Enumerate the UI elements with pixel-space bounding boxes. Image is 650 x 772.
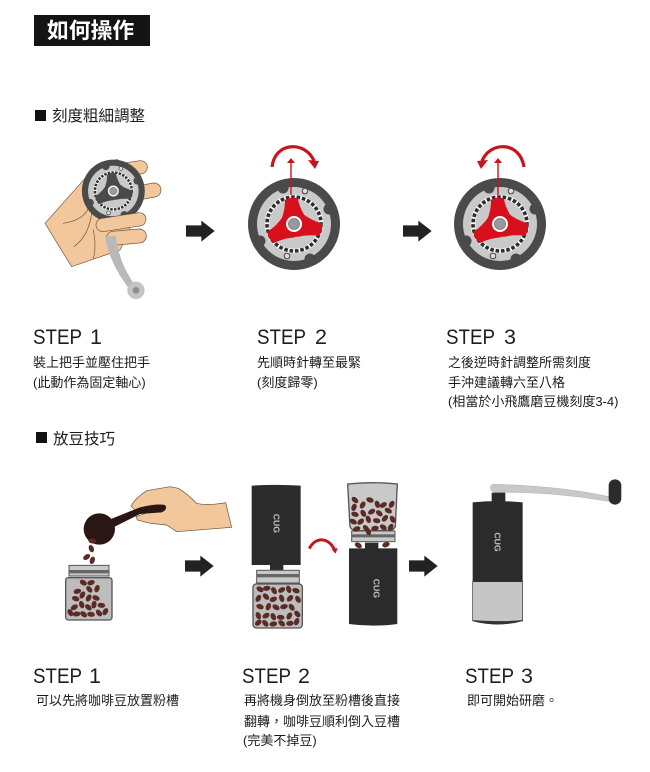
icon: palm and back fingers [45, 159, 154, 267]
bottom step 3 text: STEP [465, 664, 514, 688]
step 3 text: STEP [446, 325, 495, 349]
step 2 text: 2 [315, 325, 327, 349]
bottom step 1 text: 可以先將咖啡豆放置粉槽 [36, 693, 179, 708]
falling beans [82, 538, 96, 565]
icon: handle [105, 236, 145, 299]
bottom step 3 text: 即可開始研磨。 [467, 693, 558, 708]
step 1 text: (此動作為固定軸心) [33, 375, 146, 390]
icon: grinder body upright: CUG [372, 579, 382, 598]
step 3 text: (相當於小飛鷹磨豆機刻度3-4) [448, 394, 618, 409]
bottom step 1 text [33, 664, 179, 708]
step 3 text: 手沖建議轉六至八格 [448, 375, 565, 390]
bottom step 3 text [465, 664, 558, 708]
bottom step 2 text: 2 [298, 664, 310, 688]
bottom step 2 text: 翻轉，咖啡豆順利倒入豆槽 [244, 714, 400, 729]
title: 如何操作 [47, 18, 134, 43]
illustration: assembled grinder [473, 479, 621, 624]
icon: hand [131, 487, 232, 532]
step 2 text: 先順時針轉至最緊 [257, 355, 361, 370]
icon: grinder body upright [349, 543, 397, 626]
bottom step 2 text: STEP [242, 664, 291, 688]
icon: grinder body upside down: CUG [271, 514, 281, 533]
step 3 text: 3 [504, 325, 516, 349]
heading: dial adjustment: 刻度粗細調整 [52, 107, 145, 125]
step 2 text: STEP [257, 325, 306, 349]
step 1 text [33, 325, 150, 390]
illustration: scooping beans into jar [66, 487, 232, 620]
icon: crank arm [490, 479, 621, 505]
icon: curved red arrow [309, 540, 338, 554]
icon: grinder body upside down [252, 485, 301, 570]
bottom step 2 text: (完美不掉豆) [243, 733, 317, 748]
arrow [409, 556, 438, 577]
icon: front finger [103, 219, 139, 225]
illustration: dial counterclockwise [454, 147, 546, 270]
step 1 text: 裝上把手並壓住把手 [33, 355, 150, 370]
icon: scoop [84, 505, 166, 545]
icon: grinder body: CUG [492, 532, 502, 552]
icon: jar with beans [253, 570, 302, 628]
icon: clockwise arrow [272, 147, 319, 195]
icon: dial with red spinner [248, 178, 340, 270]
illustration: grinder on jar and flipped [252, 483, 397, 628]
bottom step 3 text: 3 [521, 664, 533, 688]
step 1 text: STEP [33, 325, 82, 349]
illustration: dial clockwise [248, 147, 340, 270]
title [34, 15, 150, 46]
step 3 text [446, 325, 618, 409]
arrow [403, 221, 432, 242]
icon: jar [66, 565, 112, 620]
bottom step 2 text [242, 664, 400, 748]
icon: dial with red spinner [454, 178, 546, 270]
icon: inverted jar with beans [348, 483, 397, 549]
icon: counterclockwise arrow [477, 147, 524, 195]
step 1 text: 1 [90, 325, 102, 349]
illustration: hand holding dial [45, 159, 154, 299]
icon: dial [82, 160, 145, 222]
icon: grinder body [473, 501, 523, 624]
arrow [186, 221, 215, 242]
arrow [185, 556, 214, 577]
bottom step 2 text: 再將機身倒放至粉槽後直接 [244, 693, 400, 708]
step 3 text: 之後逆時針調整所需刻度 [448, 355, 591, 370]
heading: bean loading tips: 放豆技巧 [53, 430, 115, 448]
bottom step 1 text: STEP [33, 664, 82, 688]
step 2 text: (刻度歸零) [257, 375, 318, 390]
beans in jar [66, 579, 109, 619]
bottom step 1 text: 1 [89, 664, 101, 688]
step 2 text [257, 325, 361, 390]
